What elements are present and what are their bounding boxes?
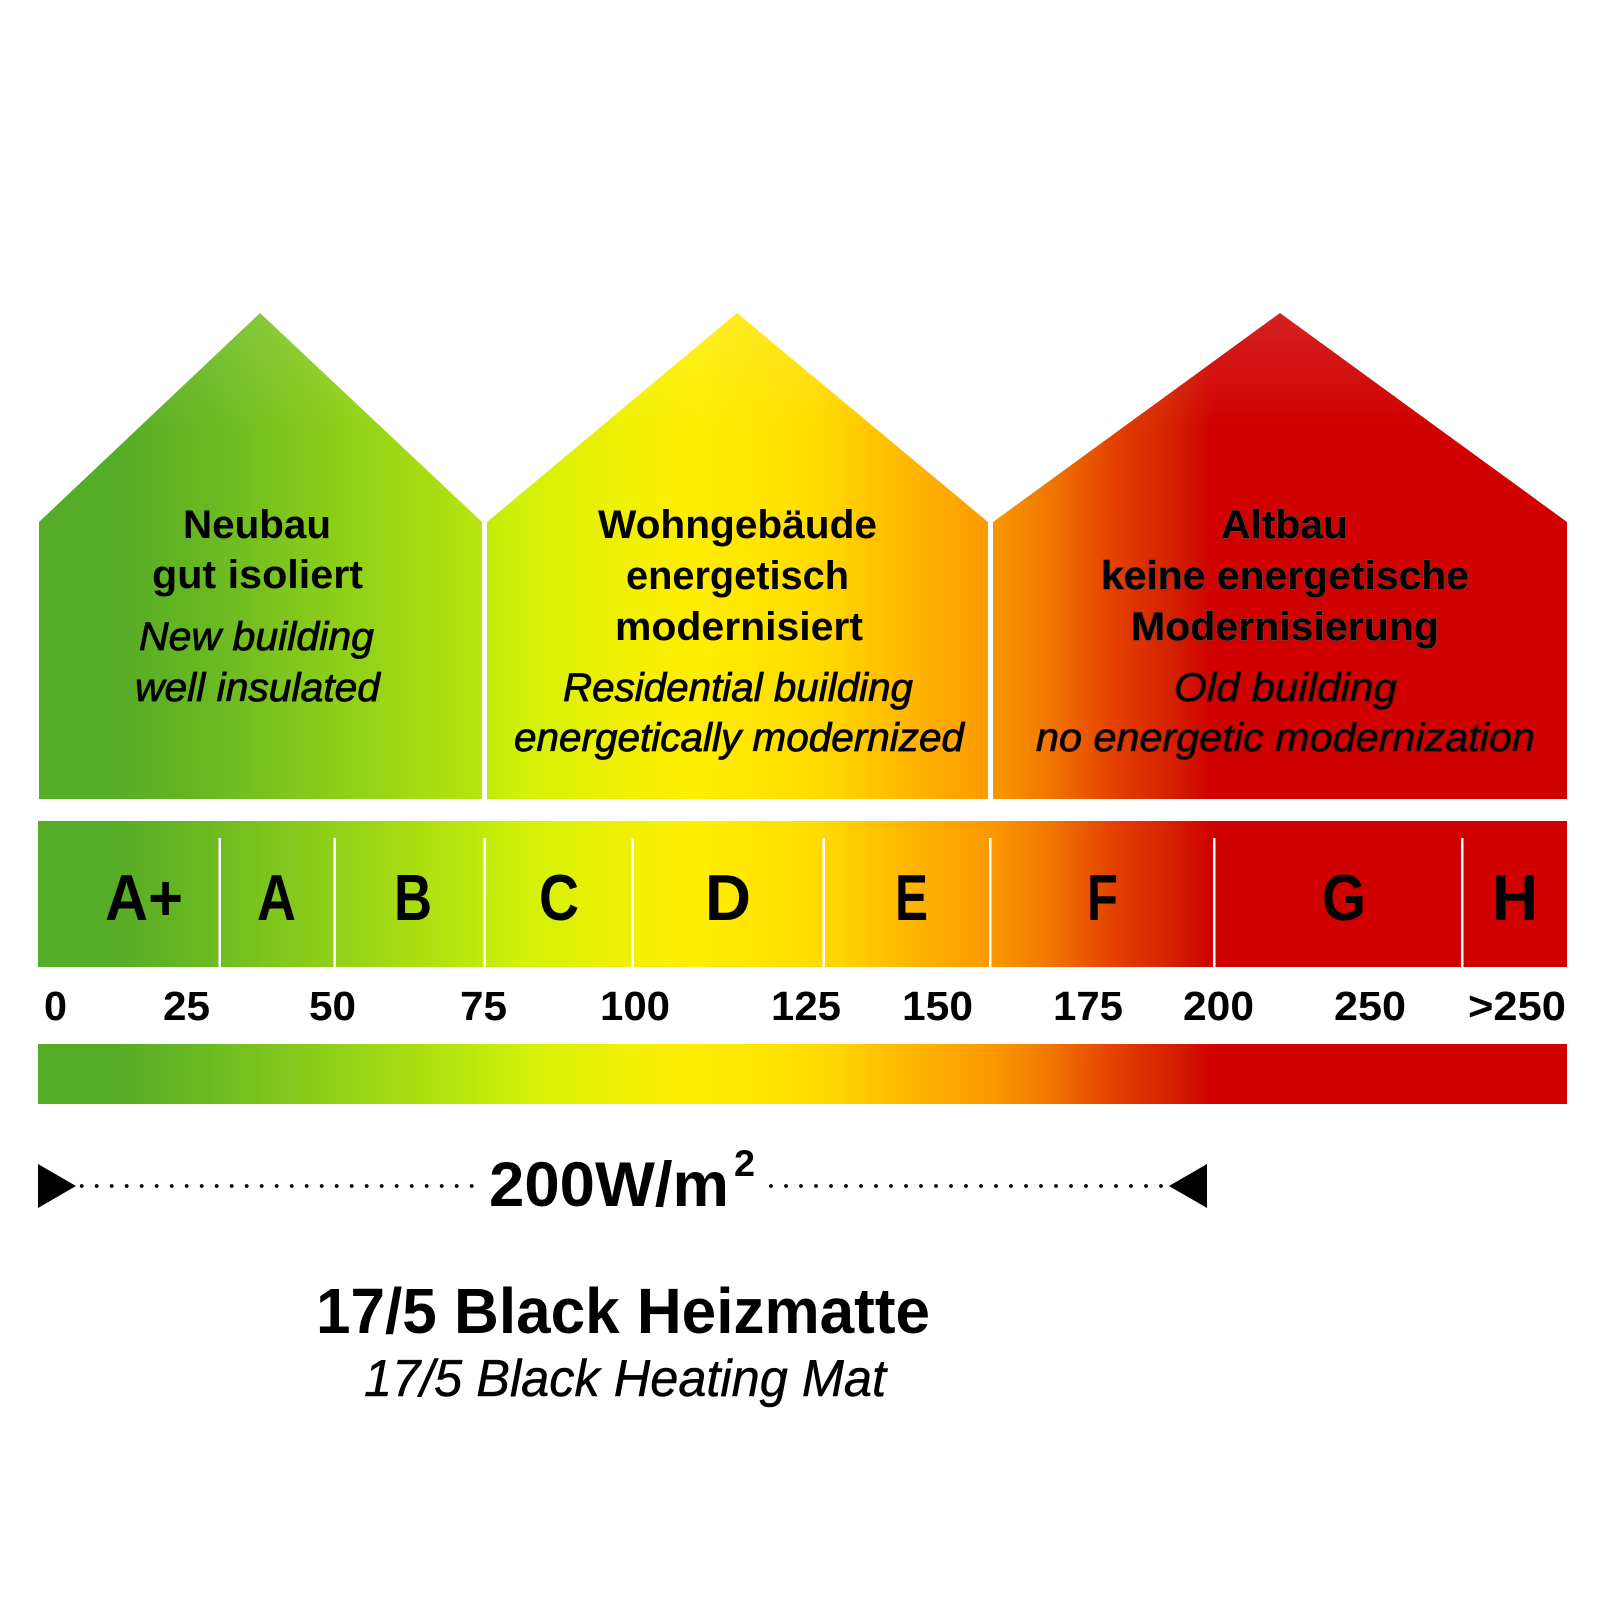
arrow: 200 W/m2 range — [38, 1143, 1207, 1220]
heading: Neubau gut isoliert: gut isoliert — [152, 553, 363, 597]
panel: house residential building — [487, 313, 988, 799]
title: 17/5 Black Heizmatte: 17/5 Black Heizmatte — [316, 1275, 930, 1347]
scale numbers: 150 — [902, 983, 973, 1029]
scale numbers: 125 — [771, 983, 841, 1029]
heading: Wohngebäude energetisch modernisiert — [598, 503, 877, 649]
scale numbers: 25 — [163, 983, 210, 1029]
panel: house old building — [993, 313, 1567, 799]
energy class letters: C — [539, 861, 579, 934]
panel: energy class bar — [38, 821, 1567, 967]
text: Residential building energetically modernized: Residential building — [563, 666, 913, 710]
energy class letters: G — [1322, 861, 1366, 934]
label: 200W/m²: 200W/m — [489, 1150, 729, 1220]
scale numbers: 0 — [44, 983, 67, 1029]
scale numbers: 250 — [1334, 983, 1406, 1029]
energy class letters: D — [705, 861, 751, 934]
energy class letters: E — [895, 861, 928, 934]
text: New building well insulated: well insulated — [135, 666, 382, 710]
heading: Neubau gut isoliert: Neubau — [183, 503, 331, 547]
gradient scale bar — [38, 1044, 1567, 1104]
text: Old building no energetic modernization: Old building — [1174, 666, 1397, 710]
scale numbers: 75 — [460, 983, 507, 1029]
scale numbers — [44, 983, 1566, 1029]
text: New building well insulated: New building — [139, 615, 374, 659]
energy class letters: B — [394, 861, 432, 934]
energy class letters: A+ — [105, 861, 183, 934]
heading: Altbau keine energetische Modernisierung: keine energetische — [1101, 554, 1469, 598]
text: Old building no energetic modernization — [1036, 666, 1535, 760]
scale numbers: 200 — [1183, 983, 1254, 1029]
energy class letters: F — [1087, 861, 1118, 934]
energy class letters: H — [1492, 861, 1538, 934]
scale numbers: 100 — [600, 983, 670, 1029]
scale numbers: 175 — [1053, 983, 1123, 1029]
energy class letters — [105, 861, 1538, 934]
heading: Wohngebäude energetisch modernisiert: Wohngebäude — [598, 503, 877, 547]
heading: Wohngebäude energetisch modernisiert: modernisiert — [615, 605, 863, 649]
heading: Wohngebäude energetisch modernisiert: energetisch — [626, 554, 849, 598]
energy class letters: A — [257, 861, 296, 934]
text: Residential building energetically modernized — [514, 666, 966, 760]
text: Old building no energetic modernization: no energetic modernization — [1036, 716, 1535, 760]
heading: Altbau keine energetische Modernisierung — [1101, 503, 1469, 649]
text: Residential building energetically modernized: energetically modernized — [514, 716, 966, 760]
text: New building well insulated — [135, 615, 382, 710]
scale numbers: >250 — [1468, 983, 1566, 1029]
scale numbers: 50 — [309, 983, 356, 1029]
label: 200W/m²: 2 — [734, 1143, 755, 1184]
heading: Neubau gut isoliert — [152, 503, 363, 597]
panel: house new building — [39, 313, 482, 799]
heading: Altbau keine energetische Modernisierung: Altbau — [1221, 503, 1348, 547]
heading: Altbau keine energetische Modernisierung: Modernisierung — [1131, 605, 1439, 649]
subtitle: 17/5 Black Heating Mat: 17/5 Black Heating Mat — [364, 1350, 888, 1408]
